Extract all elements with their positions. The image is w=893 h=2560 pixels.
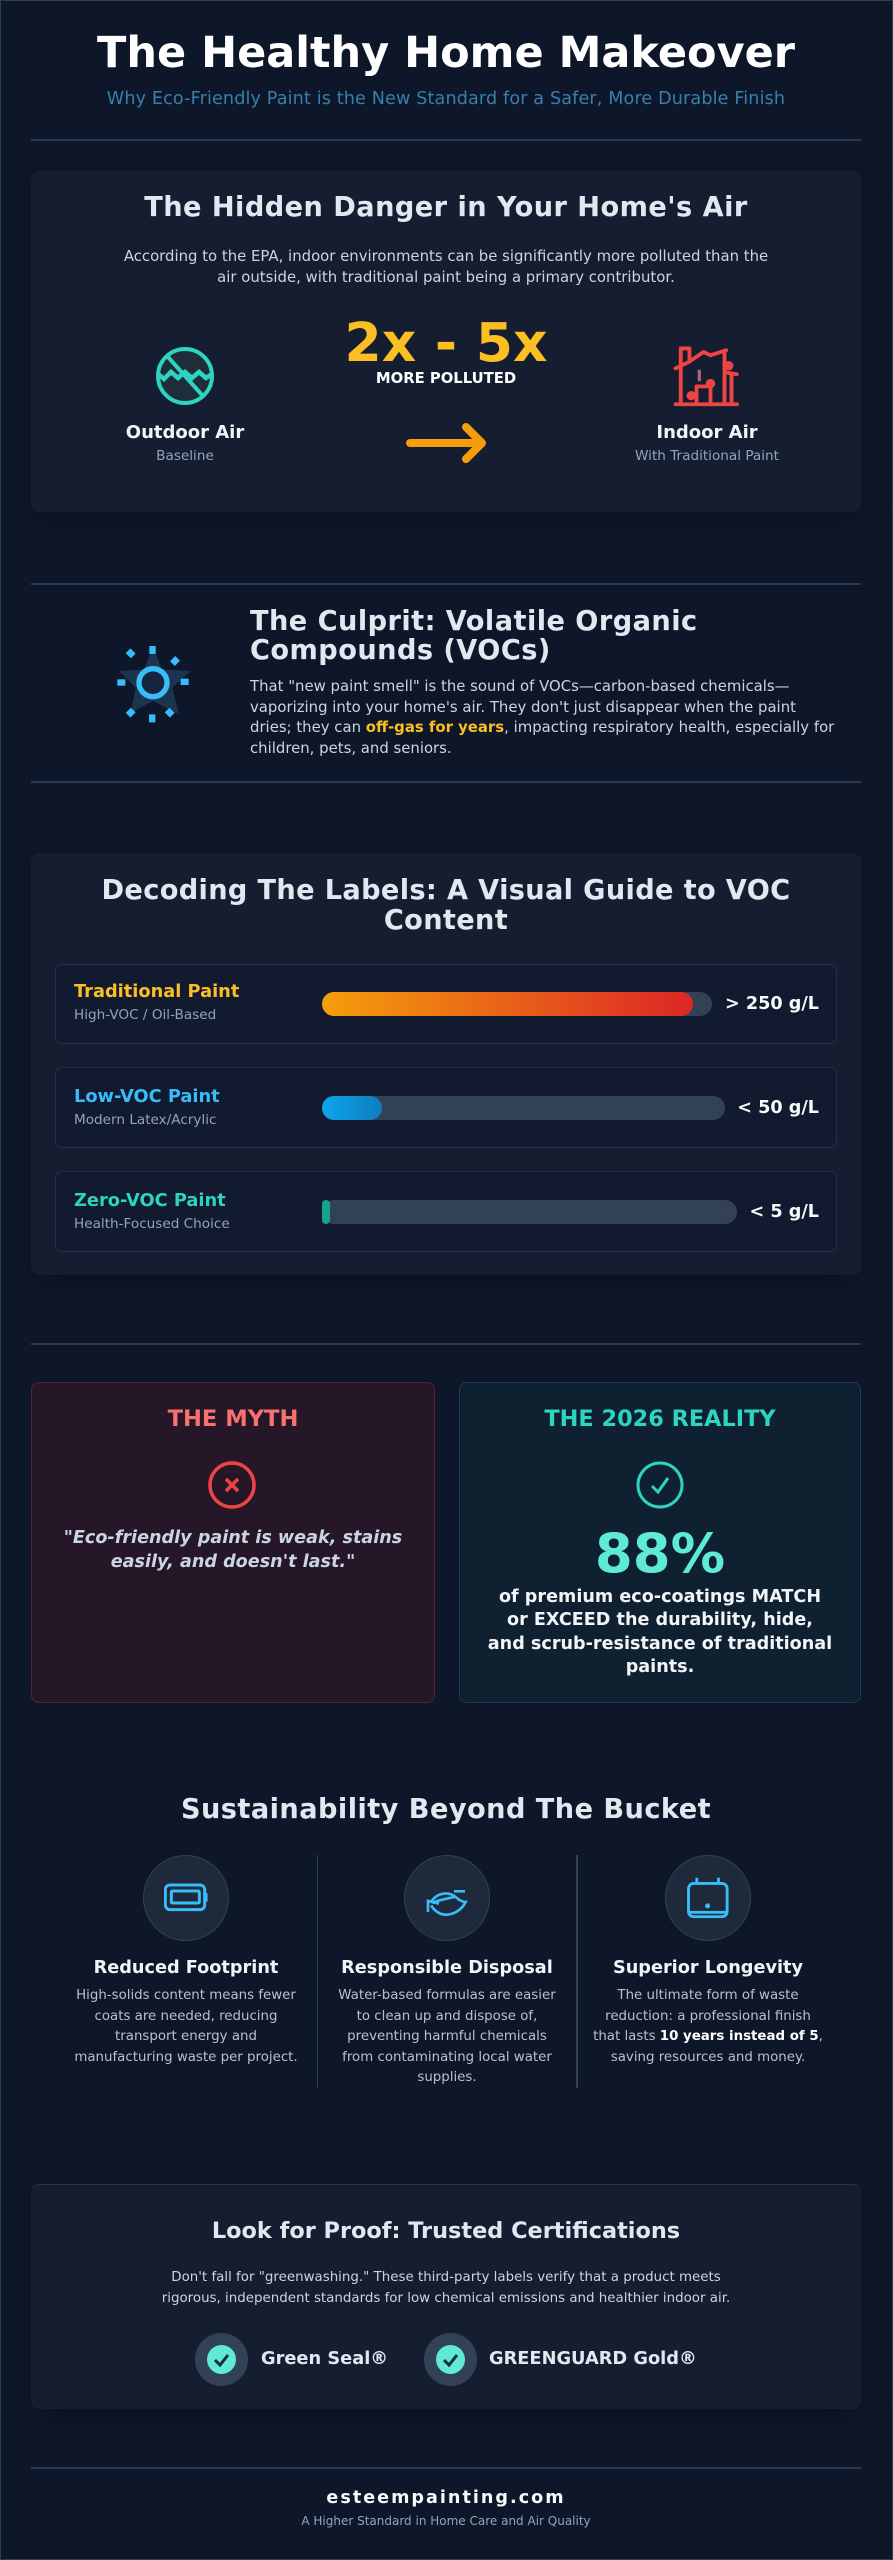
text: responsible disposal: to clean up and dispose of, xyxy=(357,2008,537,2024)
text: reduced footprint: coats are needed, reducing xyxy=(95,2008,277,2024)
panel: decoding the labels xyxy=(31,853,861,1275)
icon: calendar longevity xyxy=(665,1855,751,1941)
label: indoor air: Indoor Air xyxy=(656,422,758,443)
text: greenwashing: Don't fall for "greenwashing." These third-party labels verify that a product meets xyxy=(171,2270,721,2285)
subtitle: Why Eco-Friendly Paint is the New Standard for a Safer, More Durable Finish xyxy=(107,89,785,109)
label: outdoor air: Outdoor Air xyxy=(126,422,244,443)
note: zero VOC: Health-Focused Choice xyxy=(74,1216,230,1232)
stat: 88 percent: 88% xyxy=(595,1522,725,1585)
title: superior longevity: Superior Longevity xyxy=(613,1958,803,1978)
text: VOC explanation: dries; they can off-gas for years, impacting respiratory health, especially for xyxy=(250,718,834,736)
heading: myth: THE MYTH xyxy=(168,1406,298,1432)
column: superior longevity xyxy=(593,1855,823,2064)
heading: certifications: Look for Proof: Trusted Certifications xyxy=(212,2218,680,2244)
text: VOC explanation: children, pets, and seniors. xyxy=(250,738,452,756)
text: VOC explanation: That "new paint smell" is the sound of VOCs—carbon-based chemicals— xyxy=(250,677,790,695)
badge: greenguard gold xyxy=(424,2333,697,2386)
text: superior longevity xyxy=(593,1988,823,2064)
text: reduced footprint xyxy=(74,1988,298,2064)
row: traditional paint xyxy=(55,964,837,1044)
heading: culprit: The Culprit: Volatile Organic xyxy=(250,606,698,637)
text: VOC explanation xyxy=(250,677,834,756)
note: traditional: High-VOC / Oil-Based xyxy=(74,1007,216,1023)
heading: culprit: Compounds (VOCs) xyxy=(250,635,551,666)
icon: green seal check xyxy=(195,2333,248,2386)
column: responsible disposal xyxy=(338,1855,556,2085)
icon: indoor air xyxy=(674,346,739,406)
text: EPA intro: air outside, with traditional paint being a primary contributor. xyxy=(217,268,675,286)
panel: hidden danger xyxy=(31,171,861,512)
text: reality detail: paints. xyxy=(626,1657,694,1677)
bar: low VOC xyxy=(322,1096,725,1120)
divider xyxy=(576,1855,578,2088)
icon: check xyxy=(636,1462,684,1508)
text: greenwashing xyxy=(162,2270,730,2306)
note: low VOC: Modern Latex/Acrylic xyxy=(74,1112,217,1128)
panel: the 2026 reality xyxy=(459,1382,861,1703)
text: responsible disposal xyxy=(338,1988,556,2085)
footer xyxy=(301,2488,591,2528)
panel: culprit VOCs xyxy=(117,606,834,756)
text: myth quote xyxy=(64,1528,402,1572)
value: zero VOC: < 5 g/L xyxy=(750,1202,819,1222)
text: reality detail: or EXCEED the durability, hide, xyxy=(507,1610,813,1630)
name: low VOC: Low-VOC Paint xyxy=(74,1086,220,1107)
sublabel: with traditional paint: With Traditional Paint xyxy=(635,448,779,464)
text: VOC explanation: vaporizing into your home's air. They don't just disappear when the paint xyxy=(250,698,796,716)
name: zero VOC: Zero-VOC Paint xyxy=(74,1190,226,1211)
heading: hidden danger: The Hidden Danger in Your Home's Air xyxy=(144,192,748,223)
icon: battery footprint xyxy=(143,1855,229,1941)
text: superior longevity: saving resources and money. xyxy=(611,2050,805,2064)
icon: cross xyxy=(208,1461,256,1509)
value: low VOC: < 50 g/L xyxy=(737,1098,819,1118)
stat: 2x to 5x: 2x - 5x xyxy=(345,311,547,374)
icon: outdoor air xyxy=(156,347,214,405)
title: reduced footprint: Reduced Footprint xyxy=(94,1958,278,1978)
heading: decoding: Decoding The Labels: A Visual Guide to VOC xyxy=(102,875,790,906)
name: traditional: Traditional Paint xyxy=(74,981,239,1002)
title: responsible disposal: Responsible Disposal xyxy=(341,1958,553,1978)
heading: culprit xyxy=(250,606,698,666)
text: myth quote: easily, and doesn't last." xyxy=(111,1552,355,1572)
panel: the myth xyxy=(31,1382,435,1703)
text: reality detail: of premium eco-coatings MATCH xyxy=(499,1587,821,1607)
icon: greenguard check xyxy=(424,2333,477,2386)
heading: sustainability: Sustainability Beyond The Bucket xyxy=(181,1794,711,1825)
text: responsible disposal: preventing harmful chemicals xyxy=(347,2029,547,2044)
heading: decoding xyxy=(102,875,790,936)
arrow: outdoor to indoor xyxy=(406,423,486,463)
text: reduced footprint: transport energy and xyxy=(115,2029,257,2044)
text: greenwashing: rigorous, independent standards for low chemical emissions and healthier indoor air. xyxy=(162,2291,730,2306)
text: responsible disposal: from contaminating local water xyxy=(342,2050,552,2064)
text: superior longevity: that lasts 10 years instead of 5, xyxy=(593,2029,823,2044)
label: greenguard gold: GREENGUARD Gold® xyxy=(489,2348,697,2369)
icon: recycling leaf xyxy=(404,1855,490,1941)
text: myth quote: "Eco-friendly paint is weak, stains xyxy=(64,1528,402,1548)
badge: green seal xyxy=(195,2333,388,2386)
text: reduced footprint: manufacturing waste per project. xyxy=(74,2050,298,2064)
label: more polluted: MORE POLLUTED xyxy=(376,370,516,387)
text: reality detail xyxy=(488,1587,832,1677)
column: reduced footprint xyxy=(74,1855,298,2064)
title: The Healthy Home Makeover xyxy=(97,28,795,78)
bar: traditional xyxy=(322,992,712,1016)
heading: reality: THE 2026 REALITY xyxy=(544,1406,776,1432)
divider xyxy=(316,1855,318,2088)
panel: sustainability columns xyxy=(74,1855,823,2088)
text: reality detail: and scrub-resistance of traditional xyxy=(488,1634,832,1654)
footer: tagline: A Higher Standard in Home Care and Air Quality xyxy=(301,2514,591,2528)
sublabel: baseline: Baseline xyxy=(156,448,214,464)
text: superior longevity: The ultimate form of waste xyxy=(617,1988,799,2003)
row: low VOC paint xyxy=(55,1067,837,1148)
text: EPA intro xyxy=(124,247,768,286)
row: zero VOC paint xyxy=(55,1171,837,1252)
icon: VOC molecule sun xyxy=(117,646,190,722)
text: EPA intro: According to the EPA, indoor environments can be significantly more polluted than the xyxy=(124,247,768,265)
text: responsible disposal: supplies. xyxy=(417,2070,477,2085)
heading: decoding: Content xyxy=(384,905,508,936)
header xyxy=(97,28,795,109)
text: superior longevity: reduction: a professional finish xyxy=(605,2008,811,2024)
panel: certifications xyxy=(31,2184,861,2409)
value: traditional: > 250 g/L xyxy=(725,994,819,1014)
text: responsible disposal: Water-based formulas are easier xyxy=(338,1988,556,2003)
footer: website: esteempainting.com xyxy=(326,2488,566,2508)
label: green seal: Green Seal® xyxy=(261,2348,388,2369)
text: reduced footprint: High-solids content means fewer xyxy=(76,1988,296,2003)
bar: zero VOC xyxy=(322,1200,737,1224)
